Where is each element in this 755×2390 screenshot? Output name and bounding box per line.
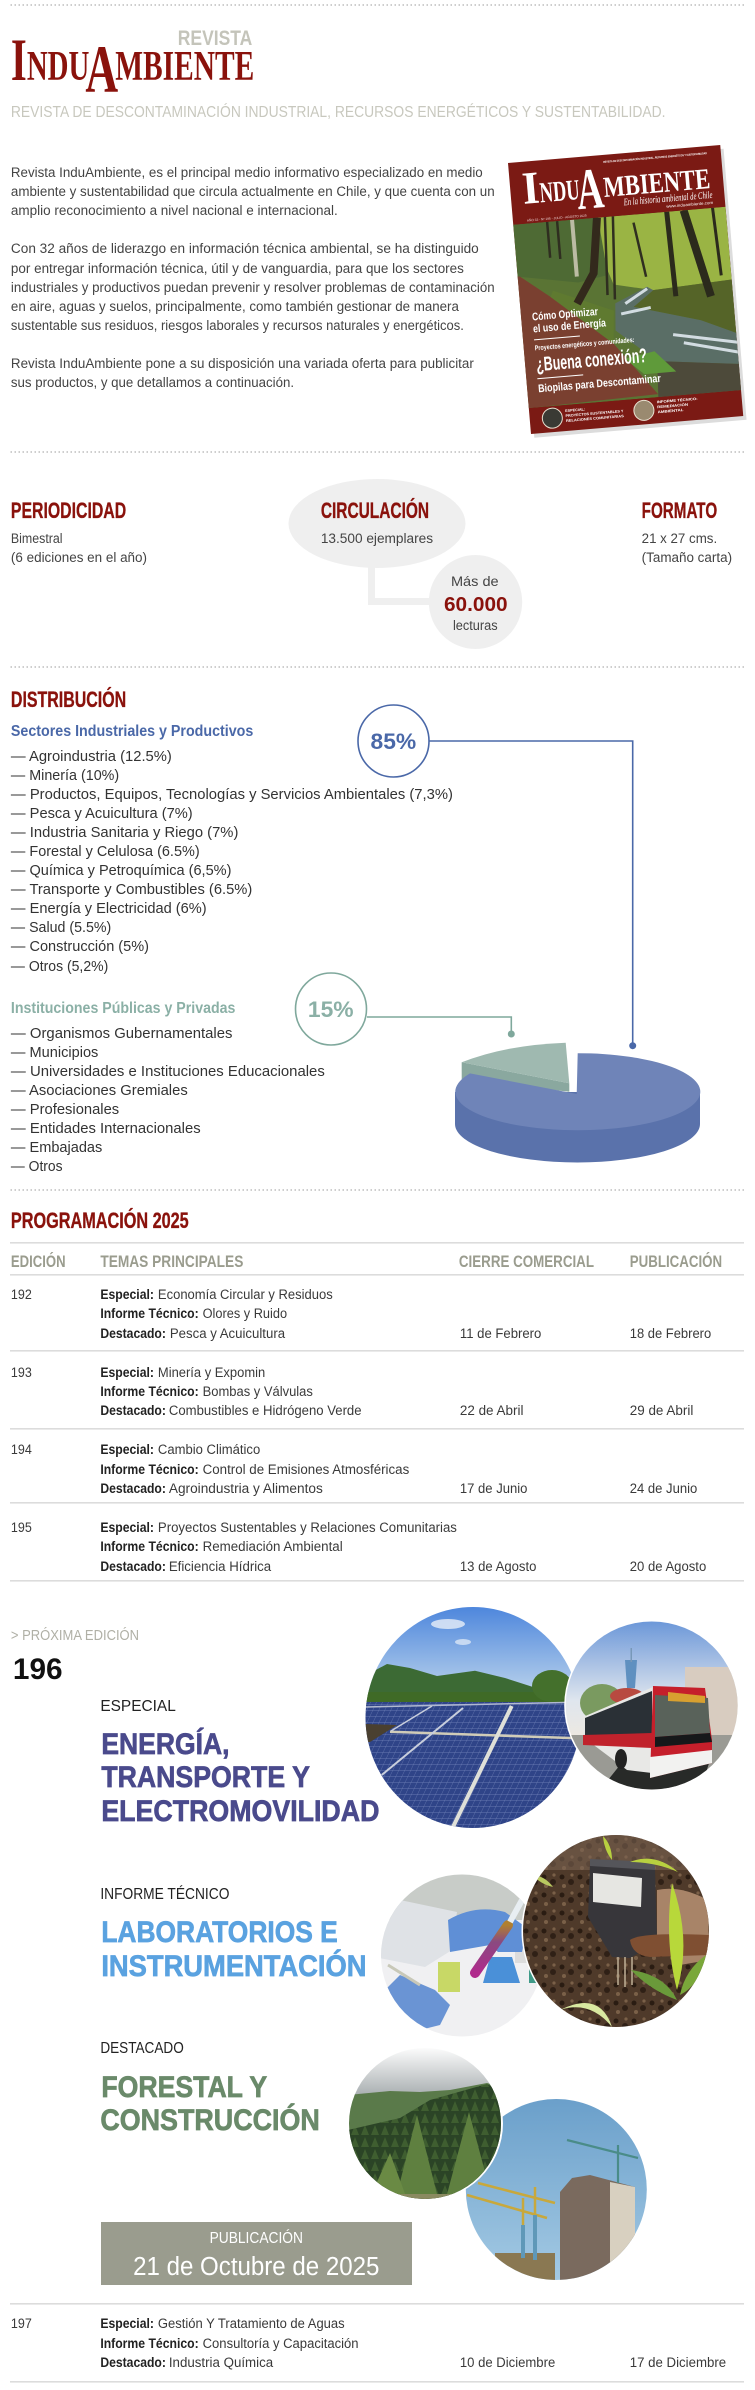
cover logo: REVISTA DE DESCONTAMINACIÓN INDUSTRIAL, RECURSOS ENERGÉTICOS Y SUSTENTABILIDAD xyxy=(603,150,707,164)
intro text: Con 32 años de liderazgo en información técnica ambiental, se ha distinguido xyxy=(11,240,479,256)
row 193: Minería y Expomin xyxy=(158,1364,265,1380)
cover logo: I xyxy=(520,162,541,214)
circulacion bubbles: lecturas xyxy=(453,617,498,633)
cover headlines: Cómo Optimizar xyxy=(532,306,599,323)
especial block: ELECTROMOVILIDAD xyxy=(101,1795,379,1828)
row 194: Especial: xyxy=(100,1441,154,1457)
row 195: 195 xyxy=(11,1519,32,1535)
cover footer: AMBIENTAL xyxy=(657,408,685,414)
photo: pine forest xyxy=(347,2046,504,2204)
cover headlines: Biopilas para Descontaminar xyxy=(538,373,662,395)
cover headlines: ¿Buena conexión? xyxy=(535,345,648,376)
list: instituciones: — Entidades Internacionales xyxy=(11,1120,201,1137)
row 192: Pesca y Acuicultura xyxy=(170,1325,285,1341)
list: instituciones: — Municipios xyxy=(11,1044,98,1061)
cover headlines xyxy=(532,301,662,395)
photo: electric bus xyxy=(563,1620,741,1792)
cover footer xyxy=(542,396,699,429)
callout: 85% xyxy=(358,705,636,1049)
formato xyxy=(642,498,732,565)
callout: 15% xyxy=(296,973,515,1045)
informe tecnico block: INFORME TÉCNICO xyxy=(100,1884,229,1903)
periodicidad: PERIODICIDAD xyxy=(11,498,126,523)
row 195: 13 de Agosto xyxy=(460,1558,537,1574)
especial block: TRANSPORTE Y xyxy=(101,1761,310,1794)
informe tecnico block: LABORATORIOS E xyxy=(101,1916,338,1949)
list: instituciones: — Otros xyxy=(11,1158,63,1175)
cover logo: AÑO 33 - Nº 195 - JULIO - AGOSTO 2025 xyxy=(527,213,587,223)
list: sectores industriales: Sectores Industriales y Productivos xyxy=(11,723,253,740)
table header: TEMAS PRINCIPALES xyxy=(100,1253,243,1271)
cover footer: REMEDIACIÓN xyxy=(657,402,689,409)
intro text: amplio reconocimiento a nivel nacional e internacional. xyxy=(11,202,338,218)
periodicidad: Bimestral xyxy=(11,530,63,546)
intro text xyxy=(11,164,495,390)
cover forest photo xyxy=(513,207,744,408)
list: instituciones: Instituciones Públicas y Privadas xyxy=(11,1000,235,1017)
row 192: Olores y Ruido xyxy=(203,1305,287,1321)
row 195: 20 de Agosto xyxy=(630,1558,706,1574)
row 193: Informe Técnico: xyxy=(100,1383,199,1399)
row 197 xyxy=(10,2303,744,2383)
row 194: Control de Emisiones Atmosféricas xyxy=(203,1461,409,1477)
periodicidad: (6 ediciones en el año) xyxy=(11,549,147,565)
informe tecnico block: INSTRUMENTACIÓN xyxy=(101,1949,367,1983)
row 194: Cambio Climático xyxy=(158,1441,260,1457)
list: sectores industriales: — Forestal y Celulosa (6.5%) xyxy=(11,843,200,860)
row 194: 24 de Junio xyxy=(630,1480,698,1496)
cover logo: MBIENTE xyxy=(602,163,711,204)
cover logo: NDU xyxy=(538,174,581,209)
row 197: Especial: xyxy=(100,2315,154,2331)
magazine cover xyxy=(508,145,747,438)
table header: PUBLICACIÓN xyxy=(630,1252,722,1271)
row 197: Consultoría y Capacitación xyxy=(203,2335,359,2351)
periodicidad xyxy=(11,498,147,565)
row 194: Informe Técnico: xyxy=(100,1461,199,1477)
row 193 xyxy=(10,1364,744,1430)
heading: programacion: PROGRAMACIÓN 2025 xyxy=(11,1208,189,1233)
row 197: Informe Técnico: xyxy=(100,2335,199,2351)
informe tecnico block xyxy=(100,1884,367,1983)
row 197: 17 de Diciembre xyxy=(630,2354,726,2370)
especial block: ESPECIAL xyxy=(100,1698,176,1715)
row 195: Remediación Ambiental xyxy=(203,1538,343,1554)
row 197: Gestión Y Tratamiento de Aguas xyxy=(158,2315,345,2331)
row 193: 29 de Abril xyxy=(630,1402,693,1418)
list: sectores industriales: — Salud (5.5%) xyxy=(11,919,111,936)
row 192: 11 de Febrero xyxy=(460,1325,542,1341)
row 195: Destacado: xyxy=(100,1558,166,1574)
row 193: Especial: xyxy=(100,1364,154,1380)
logo: Revista InduAmbiente: I xyxy=(11,27,27,93)
cover logo: A xyxy=(574,155,606,222)
row 195 xyxy=(10,1519,744,1582)
row 193: 193 xyxy=(11,1364,32,1380)
list: instituciones: — Universidades e Instituciones Educacionales xyxy=(11,1063,325,1080)
cover logo xyxy=(520,146,715,227)
list: instituciones xyxy=(11,1000,325,1175)
row 192: 18 de Febrero xyxy=(630,1325,711,1341)
intro text: Revista InduAmbiente pone a su disposición una variada oferta para publicitar xyxy=(11,355,474,371)
cover footer: INFORME TÉCNICO: xyxy=(657,396,698,404)
publication date box: 21 de Octubre de 2025 xyxy=(133,2253,379,2281)
list: instituciones: — Embajadas xyxy=(11,1139,102,1156)
row 192: Economía Circular y Residuos xyxy=(158,1286,333,1302)
row 194 xyxy=(10,1441,744,1504)
especial block: ENERGÍA, xyxy=(101,1727,229,1761)
table header: CIERRE COMERCIAL xyxy=(459,1253,594,1271)
cover logo: www.induambiente.com xyxy=(666,200,714,209)
pie chart xyxy=(455,1043,700,1162)
list: instituciones: — Profesionales xyxy=(11,1101,119,1118)
formato: (Tamaño carta) xyxy=(642,549,732,565)
edition number 196: 196 xyxy=(13,1653,63,1686)
destacado block: FORESTAL Y xyxy=(101,2071,267,2104)
list: sectores industriales: — Transporte y Combustibles (6.5%) xyxy=(11,881,252,898)
row 192: Especial: xyxy=(100,1286,154,1302)
publication date box xyxy=(101,2222,412,2285)
destacado block: DESTACADO xyxy=(100,2040,184,2057)
list: sectores industriales: — Energía y Electricidad (6%) xyxy=(11,900,207,917)
row 194: Agroindustria y Alimentos xyxy=(169,1480,323,1496)
cover footer: RELACIONES COMUNITARIAS xyxy=(566,414,625,423)
callout: 15%: 15% xyxy=(308,997,354,1022)
photo: laboratory xyxy=(381,1874,538,2036)
heading: distribucion: DISTRIBUCIÓN xyxy=(11,687,126,712)
row 194: Destacado: xyxy=(100,1480,166,1496)
logo: Revista InduAmbiente: A xyxy=(85,32,118,107)
logo: Revista InduAmbiente: NDU xyxy=(27,44,89,90)
row 194: 17 de Junio xyxy=(460,1480,528,1496)
intro text: por entregar información técnica, útil y de vanguardia, para que los sectores xyxy=(11,260,464,276)
destacado block xyxy=(100,2040,320,2137)
row 192: Destacado: xyxy=(100,1325,166,1341)
row 195: Proyectos Sustentables y Relaciones Comunitarias xyxy=(158,1519,457,1535)
list: sectores industriales: — Agroindustria (12.5%) xyxy=(11,748,172,765)
row 192: 192 xyxy=(11,1286,32,1302)
cover logo: En la historia ambiental de Chile xyxy=(623,190,713,208)
row 194: 194 xyxy=(11,1441,32,1457)
list: sectores industriales: — Otros (5,2%) xyxy=(11,958,108,975)
table header xyxy=(10,1242,744,1276)
row 197: 197 xyxy=(11,2315,32,2331)
header rule xyxy=(10,4,744,6)
list: sectores industriales xyxy=(11,723,453,975)
circulacion bubbles: 13.500 ejemplares xyxy=(321,530,433,546)
list: instituciones: — Organismos Gubernamentales xyxy=(11,1025,232,1042)
row 197: Industria Química xyxy=(169,2354,273,2370)
logo: Revista InduAmbiente xyxy=(11,27,254,107)
list: sectores industriales: — Minería (10%) xyxy=(11,767,119,784)
row 197: Destacado: xyxy=(100,2354,166,2370)
formato: FORMATO xyxy=(642,498,717,523)
row 193: Combustibles e Hidrógeno Verde xyxy=(169,1402,362,1418)
especial block xyxy=(100,1698,379,1828)
cover footer: PROYECTOS SUSTENTABLES Y xyxy=(565,409,624,418)
list: sectores industriales: — Pesca y Acuicultura (7%) xyxy=(11,805,193,822)
table header: EDICIÓN xyxy=(11,1252,66,1271)
list: sectores industriales: — Construcción (5%) xyxy=(11,938,149,955)
row 192 xyxy=(10,1286,744,1352)
intro text: Revista InduAmbiente, es el principal medio informativo especializado en medio xyxy=(11,164,483,180)
circulacion bubbles: Más de xyxy=(451,573,499,589)
row 193: Destacado: xyxy=(100,1402,166,1418)
next edition label: > PRÓXIMA EDICIÓN xyxy=(11,1627,139,1644)
list: sectores industriales: — Industria Sanitaria y Riego (7%) xyxy=(11,824,238,841)
formato: 21 x 27 cms. xyxy=(642,530,717,546)
circulacion bubbles: 60.000 xyxy=(444,594,508,616)
list: instituciones: — Asociaciones Gremiales xyxy=(11,1082,188,1099)
list: sectores industriales: — Química y Petroquímica (6,5%) xyxy=(11,862,231,879)
cover headlines: Proyectos energéticos y comunidades: xyxy=(535,337,635,352)
photo: solar panels xyxy=(364,1604,586,1832)
photo: soil meter xyxy=(520,1830,715,2030)
intro text: sustentable sus residuos, riesgos laborales y recursos naturales y energéticos. xyxy=(11,317,464,333)
photo: construction cranes xyxy=(464,2097,649,2283)
intro text: ambiente y sustentabilidad que circula actualmente en Chile, y que cuenta con un xyxy=(11,183,495,199)
callout: 85%: 85% xyxy=(371,729,416,754)
row 195: Especial: xyxy=(100,1519,154,1535)
circulacion bubbles: CIRCULACIÓN xyxy=(321,498,429,523)
list: sectores industriales: — Productos, Equipos, Tecnologías y Servicios Ambientales (7,3%) xyxy=(11,786,453,803)
circulacion bubbles xyxy=(288,479,522,649)
publication date box: PUBLICACIÓN xyxy=(210,2230,303,2247)
row 192: Informe Técnico: xyxy=(100,1305,199,1321)
logo: Revista InduAmbiente: REVISTA xyxy=(178,27,252,50)
intro text: sus productos, y que detallamos a continuación. xyxy=(11,374,294,390)
row 193: 22 de Abril xyxy=(460,1402,523,1418)
row 197: 10 de Diciembre xyxy=(460,2354,555,2370)
row 195: Informe Técnico: xyxy=(100,1538,199,1554)
cover footer: ESPECIAL: xyxy=(565,407,585,413)
cover headlines: el uso de Energía xyxy=(533,317,607,335)
tagline: REVISTA DE DESCONTAMINACIÓN INDUSTRIAL, RECURSOS ENERGÉTICOS Y SUSTENTABILIDAD. xyxy=(11,104,666,121)
logo: Revista InduAmbiente: MBIENTE xyxy=(115,44,254,90)
intro text: en aire, aguas y suelos, principalmente, como también gestionar de manera xyxy=(11,298,459,314)
destacado block: CONSTRUCCIÓN xyxy=(100,2103,320,2137)
row 195: Eficiencia Hídrica xyxy=(169,1558,271,1574)
row 193: Bombas y Válvulas xyxy=(203,1383,313,1399)
intro text: industriales y productivos puedan prevenir y resolver problemas de contaminación xyxy=(11,279,495,295)
